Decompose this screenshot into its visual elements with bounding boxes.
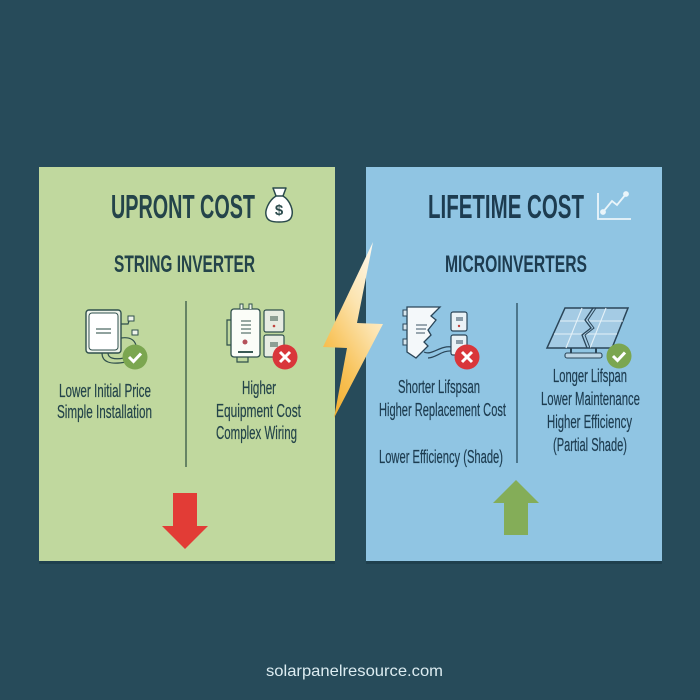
- text: simple installation: Simple Installation: [57, 402, 152, 422]
- text: equipment cost: Equipment Cost: [216, 401, 301, 421]
- text: partial shade: (Partial Shade): [553, 435, 627, 455]
- text: longer lifespan: Longer Lifspan: [553, 366, 627, 386]
- heading: lifetime cost: LIFETIME COST: [428, 188, 584, 225]
- icon: money bag: $: [275, 202, 284, 219]
- text: higher efficiency: Higher Efficiency: [547, 412, 632, 432]
- icon: solar panel with check: [547, 308, 632, 368]
- text: higher replacement cost: Higher Replacement Cost: [379, 400, 506, 420]
- icon: broken microinverter with cross: [403, 307, 480, 370]
- text: shorter lifespan: Shorter Lifspsan: [398, 377, 480, 397]
- icon: string inverter with check: [86, 310, 148, 370]
- subheading: microinverters: MICROINVERTERS: [445, 251, 587, 278]
- heading: upront cost: UPRONT COST: [111, 188, 255, 225]
- subheading: string inverter: STRING INVERTER: [114, 251, 255, 278]
- divider: [516, 303, 518, 463]
- text: higher: Higher: [242, 378, 276, 398]
- text: complex wiring: Complex Wiring: [216, 423, 297, 443]
- icon: money bag: [266, 188, 292, 222]
- arrow: red down: [162, 493, 208, 549]
- icon: string inverter with cross: [227, 304, 298, 370]
- panel: upfront cost: [39, 167, 335, 564]
- icon: lightning bolt: [323, 242, 383, 418]
- icon: line chart: [598, 192, 631, 219]
- divider: [185, 301, 187, 467]
- text: lower maintenance: Lower Maintenance: [541, 389, 640, 409]
- text: lower initial price: Lower Initial Price: [59, 381, 151, 401]
- panel: lifetime cost: [366, 167, 662, 564]
- text: lower efficiency shade: Lower Efficiency (Shade): [379, 447, 503, 467]
- footer: website: solarpanelresource.com: [266, 663, 443, 680]
- arrow: green up: [493, 480, 539, 535]
